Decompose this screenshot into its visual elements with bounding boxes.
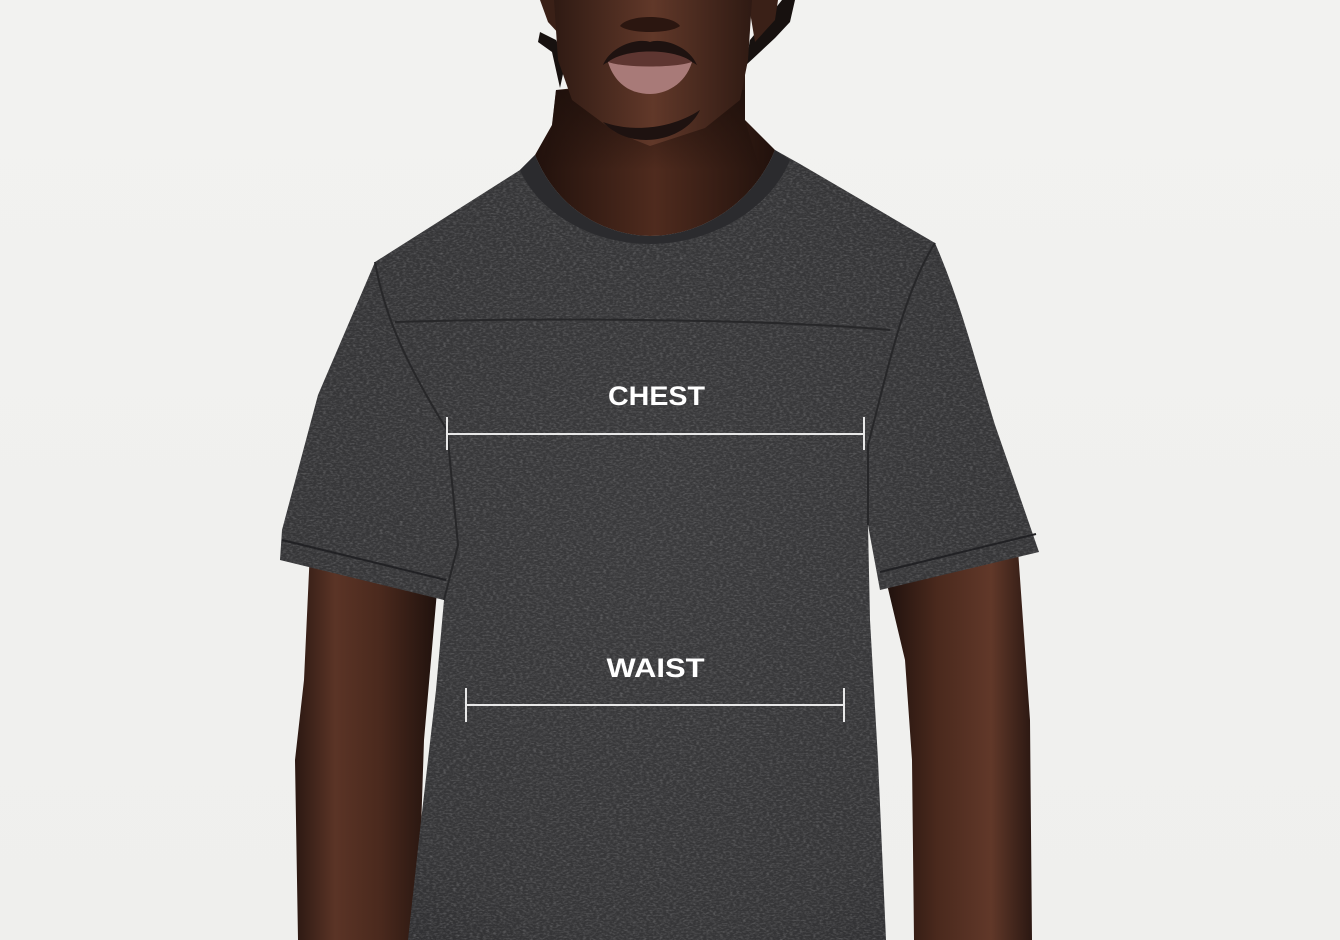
head bbox=[538, 0, 795, 146]
hair bbox=[538, 0, 795, 88]
waist label: WAIST bbox=[606, 653, 705, 683]
heather texture bbox=[270, 140, 1050, 940]
neck shadow bbox=[540, 90, 760, 170]
ears bbox=[540, 0, 778, 42]
waist line bbox=[466, 688, 844, 722]
measurement: chest bbox=[447, 381, 864, 450]
collar bbox=[520, 150, 790, 244]
sleeve hems bbox=[282, 534, 1036, 580]
measurement: waist bbox=[466, 653, 844, 722]
right arm bbox=[886, 550, 1032, 940]
shirt base bbox=[280, 150, 1039, 940]
left arm bbox=[295, 550, 438, 940]
lips bbox=[608, 53, 692, 94]
upper lip bbox=[608, 52, 692, 66]
infographic: t-shirt measurement photo bbox=[280, 0, 1039, 940]
nose shadow bbox=[620, 17, 680, 32]
chest label: CHEST bbox=[608, 381, 706, 411]
face bbox=[554, 0, 752, 146]
beard bbox=[603, 110, 700, 140]
seams and folds bbox=[375, 243, 935, 600]
chest line bbox=[447, 417, 864, 450]
moustache bbox=[603, 41, 697, 65]
t-shirt bbox=[270, 140, 1050, 940]
neck bbox=[535, 70, 775, 236]
